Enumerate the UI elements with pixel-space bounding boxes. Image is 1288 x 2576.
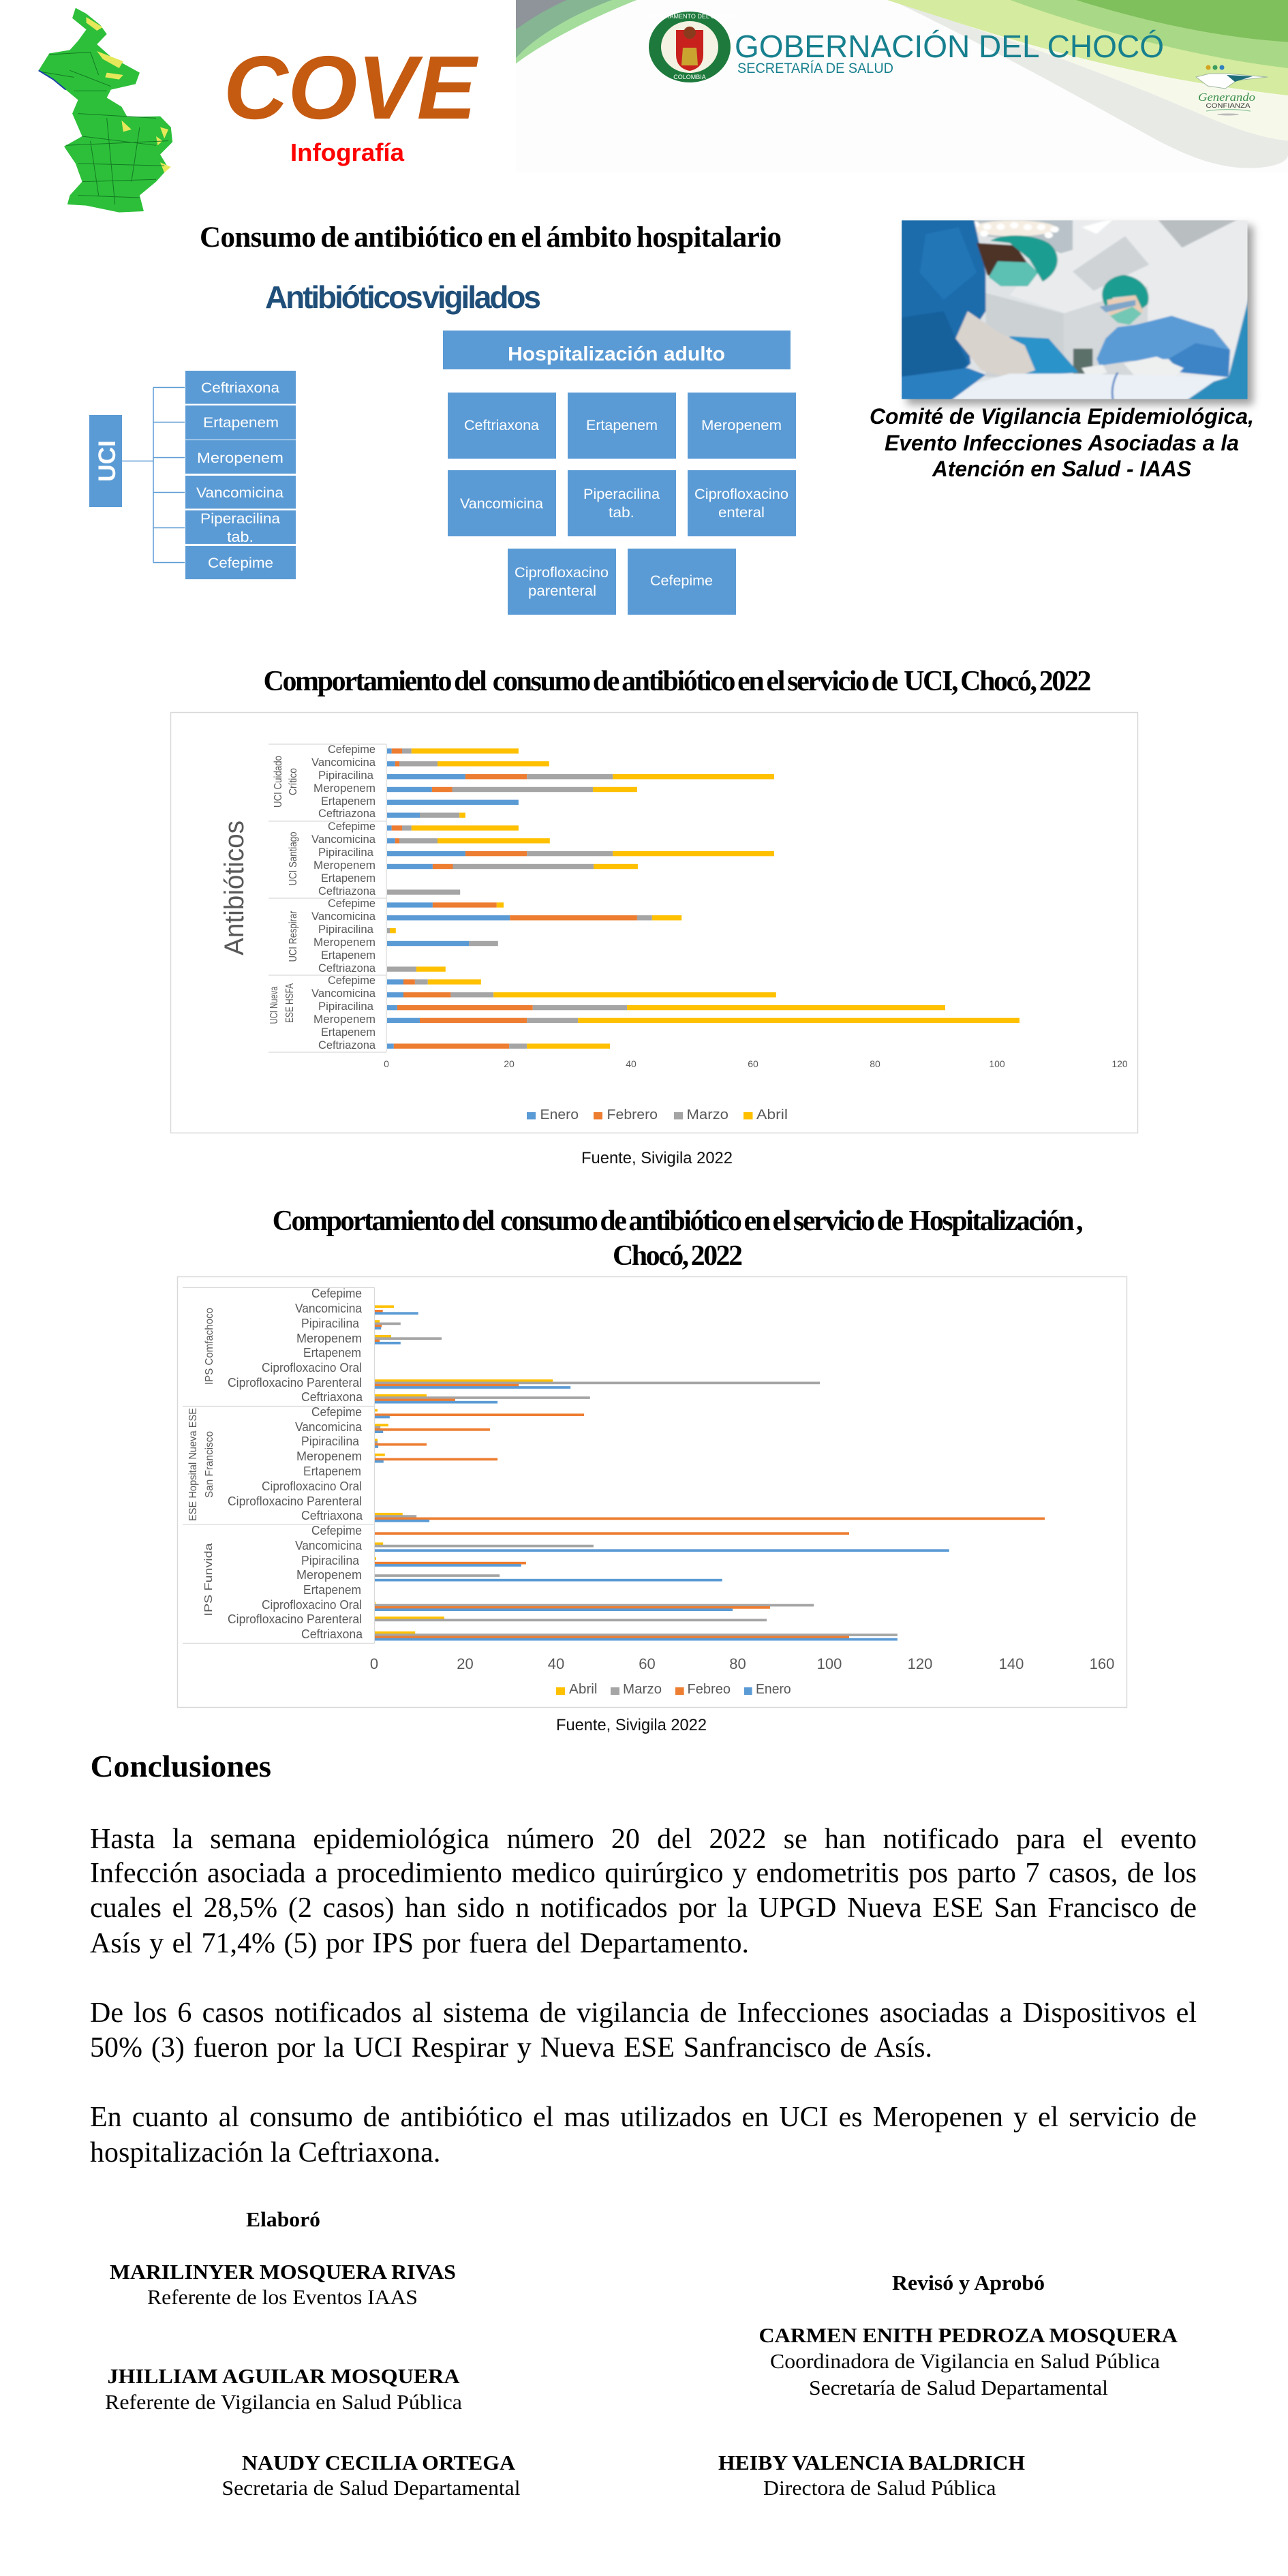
signatures: Revisó y Aprobó block: Revisó y Aprobó bbox=[892, 2271, 1045, 2295]
row labels: Ertapenem bbox=[303, 1583, 361, 1597]
x axis labels bbox=[370, 1655, 1114, 1672]
x axis labels: 0 bbox=[370, 1655, 378, 1672]
row labels: Pipiracilina bbox=[318, 1000, 374, 1013]
source note chart 1: Fuente, Sivigila 2022 bbox=[581, 1149, 733, 1167]
Hospitalización antibiotic boxes: Meropenem bbox=[701, 418, 782, 433]
legend: Marzo bbox=[687, 1107, 729, 1122]
row labels: Ciprofloxacino Parenteral bbox=[228, 1376, 362, 1390]
legend: Enero bbox=[540, 1107, 579, 1122]
heading: comportamiento Hospitalización: Comportamiento del consumo de antibiótico en el servicio de Hospitalización , bbox=[273, 1206, 1084, 1237]
row labels: Ertapenem bbox=[303, 1346, 361, 1360]
COVE logotype: COVE bbox=[224, 37, 479, 138]
Hospitalización antibiotic boxes: Ertapenem bbox=[586, 418, 658, 433]
panel: Hospitalización adulto bbox=[443, 331, 796, 615]
signatures: Revisó y Aprobó block: HEIBY VALENCIA BALDRICH bbox=[718, 2451, 1025, 2474]
heading: comportamiento UCI: Comportamiento del consumo de antibiótico en el servicio de UCI, Chocó, 2022 bbox=[263, 666, 1092, 697]
photo: surgeons in operating room bbox=[899, 218, 1253, 405]
conclusions text: hospitalización la Ceftriaxona. bbox=[90, 2137, 440, 2168]
source note chart 2: Fuente, Sivigila 2022 bbox=[556, 1716, 707, 1734]
Hospitalización antibiotic boxes: Ciprofloxacino bbox=[694, 487, 788, 502]
row labels: Ertapenem bbox=[321, 1026, 375, 1039]
signatures: Revisó y Aprobó block: Coordinadora de Vigilancia en Salud Pública bbox=[770, 2349, 1160, 2373]
conclusions text: En cuanto al consumo de antibiótico el mas utilizados en UCI es Meropenen y el servicio de bbox=[90, 2102, 1197, 2133]
x axis labels: 40 bbox=[626, 1058, 637, 1069]
group labels bbox=[269, 756, 299, 1024]
row labels: Ceftriaxona bbox=[301, 1509, 363, 1522]
signatures: Revisó y Aprobó block: Directora de Salud Pública bbox=[763, 2476, 996, 2500]
row labels: Ceftriazona bbox=[318, 962, 376, 975]
Infografía label: Infografía bbox=[290, 138, 405, 166]
icon: Gobernación crest: DEPARTAMENTO DEL CHOCÓ bbox=[645, 13, 734, 20]
x axis labels: 100 bbox=[817, 1655, 842, 1672]
UCI antibiotic boxes bbox=[185, 371, 296, 579]
legend: Febrero bbox=[607, 1107, 658, 1122]
row labels: Vancomicina bbox=[311, 910, 376, 923]
icon: Gobernación crest: COLOMBIA bbox=[673, 74, 706, 80]
signatures: Revisó y Aprobó block: CARMEN ENITH PEDROZA MOSQUERA bbox=[759, 2323, 1178, 2347]
icon: Gobernación crest bbox=[645, 12, 734, 82]
row labels: Cefepime bbox=[328, 743, 375, 756]
row labels: Vancomicina bbox=[295, 1302, 363, 1315]
row labels: Ertapenem bbox=[321, 872, 375, 885]
group labels: IPS Comfachoco bbox=[204, 1308, 215, 1385]
x axis labels: 120 bbox=[1111, 1058, 1128, 1069]
row labels: Ceftriaxona bbox=[301, 1390, 363, 1404]
Gobernación heading: SECRETARÍA DE SALUD bbox=[737, 61, 893, 76]
group labels: ESE HSFA bbox=[284, 983, 296, 1023]
row labels: Pipiracilina bbox=[301, 1435, 360, 1448]
conclusions text: Hasta la semana epidemiológica número 20 del 2022 se han notificado para el evento bbox=[90, 1824, 1197, 1855]
UCI antibiotic boxes: Vancomicina bbox=[196, 485, 283, 501]
legend bbox=[556, 1682, 791, 1697]
Hospitalización antibiotic boxes: Piperacilina bbox=[583, 487, 660, 502]
row labels: Meropenem bbox=[313, 1013, 375, 1026]
signatures: Elaboró block bbox=[105, 2207, 521, 2500]
group labels: Crítico bbox=[288, 768, 299, 795]
header banner bbox=[516, 0, 1288, 172]
x axis labels: 60 bbox=[639, 1655, 656, 1672]
heading: comportamiento Hospitalización bbox=[273, 1206, 1084, 1272]
legend: Enero bbox=[756, 1682, 791, 1697]
Hospitalización antibiotic boxes bbox=[448, 393, 796, 615]
signatures: Elaboró block: JHILLIAM AGUILAR MOSQUERA bbox=[108, 2364, 460, 2388]
conclusions text bbox=[90, 1824, 1197, 2168]
chart: UCI consumption stacked bars bbox=[170, 713, 1138, 1133]
row labels: Meropenem bbox=[296, 1332, 362, 1345]
row labels: Vancomicina bbox=[311, 756, 376, 769]
row labels: Pipiracilina bbox=[301, 1317, 360, 1330]
conclusions text: cuales el 28,5% (2 casos) han sido n notificados por la UPGD Nueva ESE San Francisco de bbox=[90, 1892, 1197, 1924]
row labels: Meropenem bbox=[313, 859, 375, 872]
row labels: Ciprofloxacino Oral bbox=[262, 1598, 362, 1612]
row labels bbox=[228, 1287, 363, 1641]
row labels: Ciprofloxacino Oral bbox=[262, 1479, 362, 1493]
group labels bbox=[187, 1308, 215, 1616]
legend: Abril bbox=[569, 1682, 597, 1697]
legend: Febreo bbox=[687, 1682, 731, 1697]
UCI antibiotic boxes: Ceftriaxona bbox=[201, 380, 279, 396]
Hospitalización antibiotic boxes: Ceftriaxona bbox=[464, 418, 539, 433]
UCI root box: UCI bbox=[94, 440, 121, 482]
group labels: IPS Funvida bbox=[203, 1543, 215, 1616]
UCI root box bbox=[89, 415, 122, 507]
group labels: UCI Santiago bbox=[288, 831, 299, 886]
panel: UCI tree diagram bbox=[89, 371, 296, 579]
row labels: Cefepime bbox=[311, 1524, 362, 1537]
legend bbox=[527, 1107, 788, 1122]
Hospitalización antibiotic boxes: enteral bbox=[718, 505, 765, 521]
row labels: Ceftriazona bbox=[318, 885, 376, 898]
row labels: Cefepime bbox=[311, 1287, 362, 1300]
Hospitalización antibiotic boxes: Ciprofloxacino bbox=[515, 565, 609, 581]
row labels: Cefepime bbox=[328, 897, 375, 910]
x axis labels: 0 bbox=[384, 1058, 389, 1069]
caption: Comité de Vigilancia: Comité de Vigilancia Epidemiológica, bbox=[870, 404, 1254, 429]
x axis labels bbox=[384, 1058, 1128, 1069]
row labels: Ertapenem bbox=[321, 949, 375, 962]
tree connectors bbox=[122, 387, 185, 563]
signatures: Elaboró block: NAUDY CECILIA ORTEGA bbox=[242, 2451, 516, 2474]
UCI antibiotic boxes: Meropenem bbox=[197, 450, 283, 466]
row labels: Ertapenem bbox=[303, 1465, 361, 1478]
row labels: Ciprofloxacino Oral bbox=[262, 1361, 362, 1375]
row labels: Ceftriazona bbox=[318, 807, 376, 820]
UCI antibiotic boxes: Piperacilina bbox=[200, 511, 280, 527]
conclusions text: Asís y el 71,4% (5) por IPS por fuera del Departamento. bbox=[90, 1928, 749, 1959]
x axis labels: 160 bbox=[1090, 1655, 1114, 1672]
signatures: Elaboró block: Secretaria de Salud Departamental bbox=[222, 2476, 521, 2500]
icon: Generando Confianza logo: CONFIANZA bbox=[1206, 102, 1250, 109]
axis title: Antibióticos: Antibióticos bbox=[219, 821, 249, 955]
Hospitalización antibiotic boxes: Vancomicina bbox=[460, 496, 543, 512]
x axis labels: 120 bbox=[908, 1655, 932, 1672]
conclusions text: De los 6 casos notificados al sistema de vigilancia de Infecciones asociadas a Dispositivos el bbox=[90, 1997, 1197, 2029]
icon: Generando Confianza logo: Generando bbox=[1198, 91, 1255, 104]
x axis labels: 20 bbox=[457, 1655, 474, 1672]
heading: Conclusiones: Conclusiones bbox=[90, 1749, 271, 1783]
legend: Abril bbox=[756, 1107, 788, 1122]
row labels: Ciprofloxacino Parenteral bbox=[228, 1494, 362, 1508]
x axis labels: 140 bbox=[999, 1655, 1024, 1672]
group labels: UCI Nueva bbox=[269, 986, 280, 1024]
row labels: Vancomicina bbox=[295, 1539, 363, 1552]
caption: Comité de Vigilancia bbox=[870, 404, 1254, 481]
x axis labels: 20 bbox=[504, 1058, 515, 1069]
heading: comportamiento Hospitalización: Chocó, 2022 bbox=[613, 1240, 743, 1272]
signatures: Elaboró block: Elaboró bbox=[246, 2207, 320, 2231]
caption: Comité de Vigilancia: Evento Infecciones Asociadas a la bbox=[885, 431, 1239, 455]
x axis labels: 40 bbox=[548, 1655, 564, 1672]
row labels: Meropenem bbox=[313, 782, 375, 795]
row labels: Ceftriaxona bbox=[301, 1627, 363, 1641]
row labels: Ertapenem bbox=[321, 795, 375, 808]
signatures: Revisó y Aprobó block bbox=[718, 2271, 1178, 2500]
row labels: Meropenem bbox=[296, 1450, 362, 1463]
UCI antibiotic boxes: Cefepime bbox=[208, 555, 273, 571]
caption: Comité de Vigilancia: Atención en Salud - IAAS bbox=[932, 457, 1192, 481]
x axis labels: 100 bbox=[989, 1058, 1005, 1069]
signatures: Elaboró block: MARILINYER MOSQUERA RIVAS bbox=[110, 2260, 456, 2284]
row labels: Pipiracilina bbox=[318, 923, 374, 936]
row labels: Cefepime bbox=[311, 1405, 362, 1419]
row labels: Ceftriazona bbox=[318, 1039, 376, 1052]
row labels: Meropenem bbox=[296, 1568, 362, 1582]
row labels: Meropenem bbox=[313, 936, 375, 949]
row labels: Cefepime bbox=[328, 820, 375, 833]
Hospitalización antibiotic boxes: parenteral bbox=[528, 583, 596, 599]
UCI antibiotic boxes: Ertapenem bbox=[203, 415, 279, 431]
legend: Marzo bbox=[623, 1682, 662, 1697]
title: Consumo de antibiótico en el ámbito hospitalario bbox=[200, 221, 782, 254]
map of Chocó bbox=[39, 8, 172, 213]
icon: Generando Confianza logo bbox=[1196, 65, 1268, 116]
UCI antibiotic boxes: tab. bbox=[227, 530, 254, 545]
Hospitalización header: Hospitalización adulto bbox=[508, 343, 725, 365]
x axis labels: 60 bbox=[748, 1058, 758, 1069]
signatures: Elaboró block: Referente de Vigilancia en Salud Pública bbox=[105, 2390, 462, 2414]
Hospitalización header bbox=[443, 331, 791, 369]
row labels bbox=[311, 743, 376, 1052]
row labels: Vancomicina bbox=[311, 987, 376, 1000]
group labels: UCI Cuidado bbox=[273, 756, 284, 808]
conclusions text: Infección asociada a procedimiento medico quirúrgico y endometritis pos parto 7 casos, de los bbox=[90, 1858, 1197, 1889]
group labels: UCI Respirar bbox=[288, 910, 299, 962]
x axis labels: 80 bbox=[870, 1058, 880, 1069]
row labels: Cefepime bbox=[328, 974, 375, 987]
Hospitalización antibiotic boxes: Cefepime bbox=[650, 573, 713, 589]
x axis labels: 80 bbox=[729, 1655, 746, 1672]
group labels: ESE Hopsital Nueva ESE bbox=[187, 1408, 199, 1521]
row labels: Pipiracilina bbox=[301, 1554, 360, 1567]
chart: Hospitalización clustered bars bbox=[177, 1277, 1127, 1708]
heading: antibióticos vigilados: Antibióticos vigilados bbox=[265, 279, 541, 315]
stacked bars bbox=[387, 748, 1019, 1049]
group labels: San Francisco bbox=[204, 1431, 215, 1498]
row labels: Vancomicina bbox=[311, 833, 376, 846]
conclusions text: 50% (3) fueron por la UCI Respirar y Nueva ESE Sanfrancisco de Asís. bbox=[90, 2032, 932, 2064]
Hospitalización antibiotic boxes: tab. bbox=[609, 505, 634, 521]
Gobernación heading: GOBERNACIÓN DEL CHOCÓ bbox=[735, 29, 1164, 64]
row labels: Pipiracilina bbox=[318, 846, 374, 859]
signatures: Elaboró block: Referente de los Eventos IAAS bbox=[147, 2285, 418, 2309]
row labels: Ciprofloxacino Parenteral bbox=[228, 1612, 362, 1626]
signatures: Revisó y Aprobó block: Secretaría de Salud Departamental bbox=[809, 2376, 1108, 2399]
clustered bars bbox=[375, 1305, 1045, 1641]
row labels: Vancomicina bbox=[295, 1420, 363, 1434]
row labels: Pipiracilina bbox=[318, 769, 374, 782]
